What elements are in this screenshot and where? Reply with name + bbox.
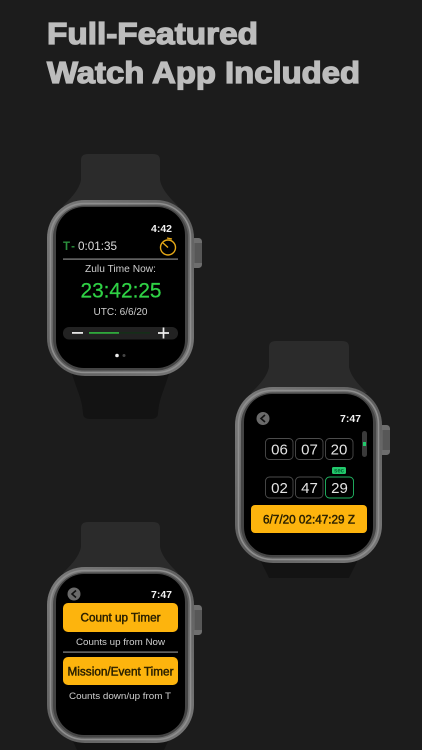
page dots — [115, 354, 126, 357]
status time: 7:47 — [340, 413, 361, 425]
sec tag — [332, 467, 346, 474]
count up button: Count up Timer — [80, 612, 161, 624]
back button — [68, 588, 80, 600]
watch case — [47, 200, 202, 376]
confirm button: 6/7/20 02:47:29 Z — [263, 514, 355, 526]
date values: 02 — [271, 480, 288, 497]
count up caption: Counts up from Now — [76, 637, 165, 648]
title: Watch App Included — [47, 56, 360, 90]
watch: timer menu screen — [47, 522, 202, 750]
watch: date entry screen — [235, 341, 390, 578]
mission button — [63, 657, 178, 685]
status time: 4:42 — [151, 223, 172, 235]
sec tag: sec — [334, 468, 345, 474]
title — [47, 17, 360, 90]
watch band — [63, 522, 178, 750]
date values: 07 — [301, 442, 318, 458]
divider — [63, 652, 178, 653]
date values: 06 — [271, 442, 288, 458]
slider — [63, 327, 178, 340]
date fields — [266, 438, 354, 498]
watch: zulu time screen — [47, 154, 202, 419]
mission button: Mission/Event Timer — [68, 666, 174, 678]
UTC date: UTC: 6/6/20 — [94, 307, 148, 318]
back button — [256, 412, 270, 425]
date values: 20 — [331, 442, 347, 458]
count up button — [63, 603, 178, 632]
date values: 29 — [331, 480, 348, 497]
icon: timer — [160, 238, 176, 255]
mission caption: Counts down/up from T — [69, 691, 171, 702]
watch case — [47, 567, 202, 743]
zulu time: 23:42:25 — [80, 280, 162, 302]
zulu label: Zulu Time Now: — [85, 264, 156, 275]
watch band — [251, 341, 367, 578]
title: Full-Featured — [47, 17, 258, 51]
countdown: 0:01:35 — [78, 241, 117, 253]
watch case — [235, 387, 390, 563]
scroll indicator — [362, 431, 367, 457]
confirm button — [251, 505, 367, 533]
status time: 7:47 — [151, 589, 172, 601]
date values: 47 — [301, 480, 318, 497]
date values — [271, 442, 348, 497]
watch band — [63, 154, 178, 419]
countdown: T - — [63, 241, 75, 253]
divider — [63, 258, 178, 260]
